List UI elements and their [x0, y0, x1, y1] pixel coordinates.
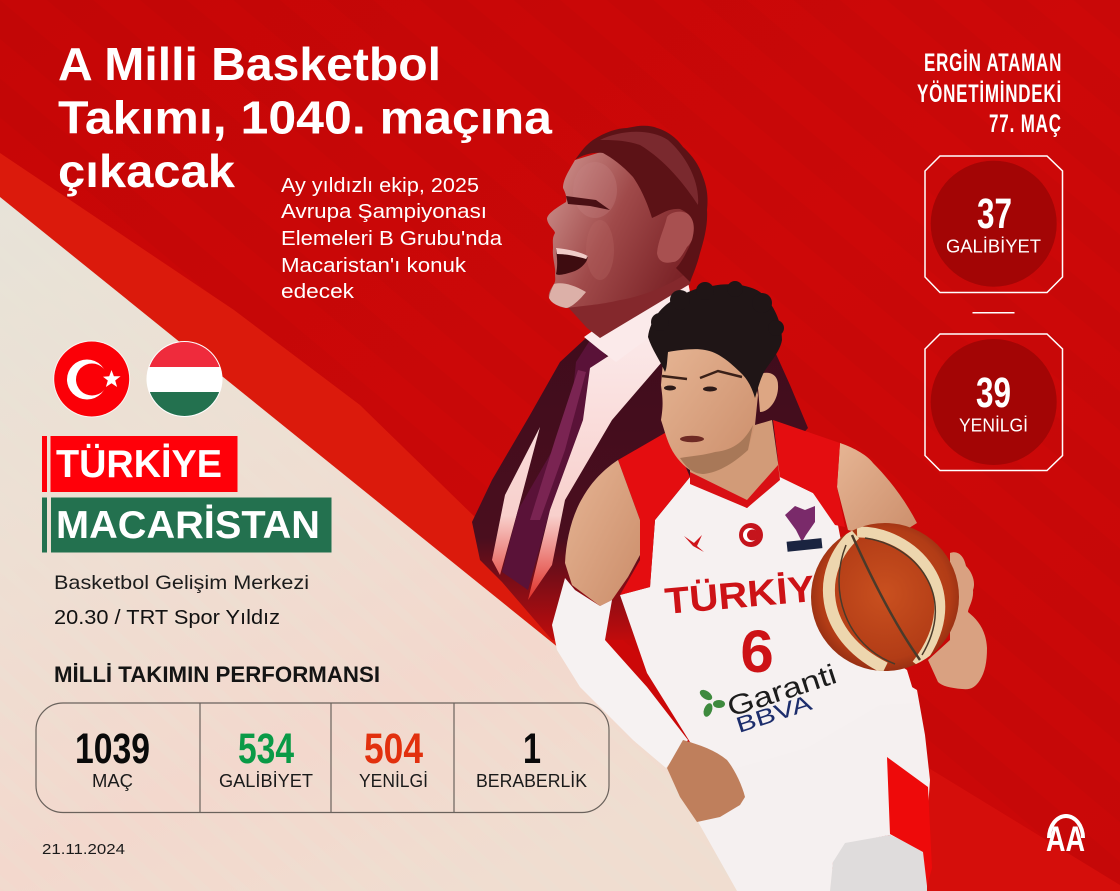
stat: matches: 1039	[75, 725, 150, 773]
stat: wins: 534	[238, 725, 294, 773]
stat card: wins 37: GALİBİYET	[946, 236, 1041, 256]
jersey right armhole	[773, 420, 845, 527]
coach brow	[566, 196, 610, 210]
stat card: losses 39: 39	[976, 369, 1011, 417]
coach mouth	[556, 249, 588, 275]
coach shirt	[528, 333, 668, 600]
title	[58, 38, 552, 197]
coach record heading: ERGİN ATAMAN	[924, 49, 1061, 77]
jersey eurobasket logo	[785, 506, 822, 552]
subtitle text: Ay yıldızlı ekip, 2025	[281, 175, 479, 197]
player arm sleeve	[552, 578, 688, 768]
background: cream triangle panel	[0, 197, 860, 891]
coach beard	[549, 283, 586, 308]
stat: draws: 1	[523, 725, 541, 773]
jersey sponsor leaf	[698, 688, 725, 718]
coach hair	[575, 126, 708, 282]
coach shirt left sliver	[492, 427, 540, 575]
player face	[661, 340, 758, 474]
subtitle text: Macaristan'ı konuk	[281, 255, 467, 277]
icon: Hungarian flag	[146, 340, 223, 420]
title: A Milli Basketbol	[58, 38, 441, 90]
jersey puma logo	[684, 535, 704, 552]
player right upper arm	[837, 443, 917, 540]
coach tie highlight	[530, 370, 586, 520]
coach collar	[584, 282, 690, 362]
icon: Turkish flag	[53, 340, 130, 418]
subtitle text	[281, 175, 503, 303]
jersey sponsor BBVA: BBVA	[733, 690, 815, 738]
subtitle text: edecek	[281, 281, 355, 303]
coach teeth	[556, 248, 588, 259]
coach jacket	[472, 290, 808, 640]
stat card: losses 39	[925, 334, 1062, 470]
player brows	[662, 371, 742, 379]
illustration: coach Ergin Ataman	[472, 126, 808, 640]
coach record heading: 77. MAÇ	[989, 110, 1061, 138]
title: çıkacak	[58, 145, 235, 197]
match venue: Basketbol Gelişim Merkezi	[54, 572, 309, 594]
coach neck	[567, 240, 700, 338]
player left upper arm	[565, 460, 640, 606]
coach tie	[502, 337, 607, 590]
player shorts	[690, 680, 930, 891]
stat card: wins 37: 37	[977, 190, 1012, 238]
team label: Macaristan: MACARİSTAN	[56, 504, 320, 547]
stat: draws	[476, 725, 587, 791]
coach cheek highlight	[586, 220, 614, 280]
player neck	[690, 420, 780, 505]
stat: losses	[359, 725, 428, 791]
title: Takımı, 1040. maçına	[58, 92, 552, 144]
performance table	[36, 703, 609, 812]
stat: wins	[219, 725, 313, 791]
jersey lettering TÜRKİY: TÜRKİY	[663, 568, 816, 622]
coach hair highlight	[600, 132, 698, 205]
basketball	[811, 523, 959, 671]
stat: losses: YENİLGİ	[359, 771, 428, 791]
coach forehead highlight	[573, 162, 617, 218]
match time and broadcaster: 20.30 / TRT Spor Yıldız	[54, 607, 280, 629]
jersey crescent badge	[739, 523, 763, 547]
player shorts red panel	[887, 757, 932, 886]
stat: draws: BERABERLİK	[476, 771, 587, 791]
stat: losses: 504	[364, 725, 423, 773]
player leg	[830, 835, 927, 891]
subtitle text: Elemeleri B Grubu'nda	[281, 228, 503, 250]
player eyes	[664, 386, 717, 392]
performance heading: MİLLİ TAKIMIN PERFORMANSI	[54, 662, 380, 687]
player mouth	[680, 436, 704, 442]
coach record heading	[917, 49, 1061, 138]
team label: Türkiye	[42, 436, 238, 492]
player right forearm and hand	[928, 552, 987, 689]
illustration: player Cedi Osman	[552, 281, 987, 891]
jersey collar	[690, 465, 780, 508]
jersey sponsor Garanti: Garanti	[723, 658, 840, 723]
date: 21.11.2024	[42, 841, 125, 858]
stat card: losses 39: YENİLGİ	[959, 416, 1028, 436]
player jersey	[620, 477, 917, 768]
player beard	[680, 425, 753, 474]
icon: AA logo: AA	[1046, 820, 1085, 859]
stat: matches	[75, 725, 150, 791]
icon: AA logo	[1046, 814, 1085, 859]
stat: matches: MAÇ	[92, 771, 133, 791]
jersey number 6: 6	[740, 618, 774, 685]
subtitle text: Avrupa Şampiyonası	[281, 201, 487, 223]
coach record heading: YÖNETİMİNDEKİ	[917, 79, 1061, 108]
player fist	[667, 740, 745, 822]
divider between cards	[972, 312, 1014, 314]
stat: wins: GALİBİYET	[219, 771, 313, 791]
coach ear	[657, 212, 695, 263]
team label: Türkiye: TÜRKİYE	[56, 443, 222, 486]
player ear	[757, 373, 778, 412]
player hair	[648, 281, 784, 398]
stat card: wins 37	[925, 156, 1062, 292]
coach face	[547, 140, 700, 308]
jersey left armhole	[618, 430, 690, 595]
